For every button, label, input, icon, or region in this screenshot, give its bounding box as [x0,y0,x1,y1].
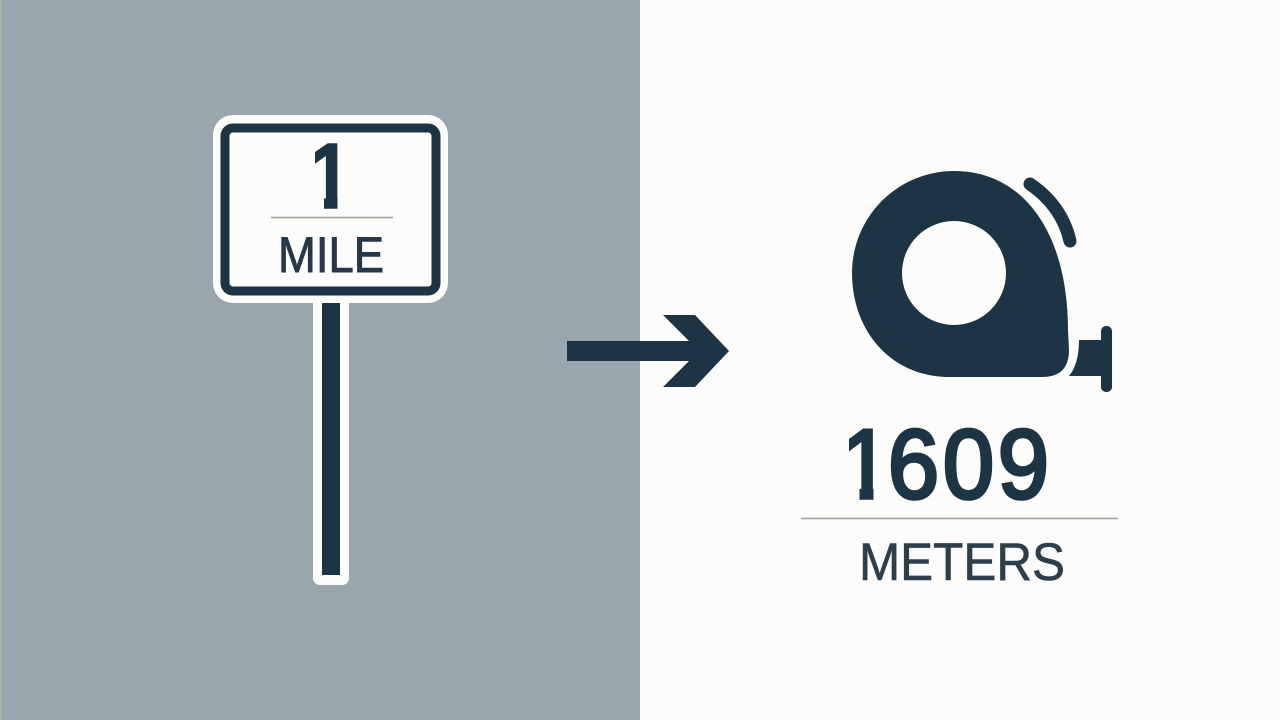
arrow: conversion [567,315,729,387]
icon: mile road sign [213,115,448,585]
value: 1609: 1609 [840,410,1049,520]
tape body [852,171,1069,377]
sign post [313,295,349,585]
panel: left background [0,0,640,720]
tape hook [1069,326,1112,392]
panel: right background [640,0,1280,720]
tape highlight arc [1030,184,1070,241]
icon: tape measure [852,171,1112,392]
sign board [213,115,448,303]
sign number: 1: 1 [305,127,355,227]
unit: METERS: METERS [859,533,1065,592]
sign unit: MILE: MILE [278,227,384,283]
